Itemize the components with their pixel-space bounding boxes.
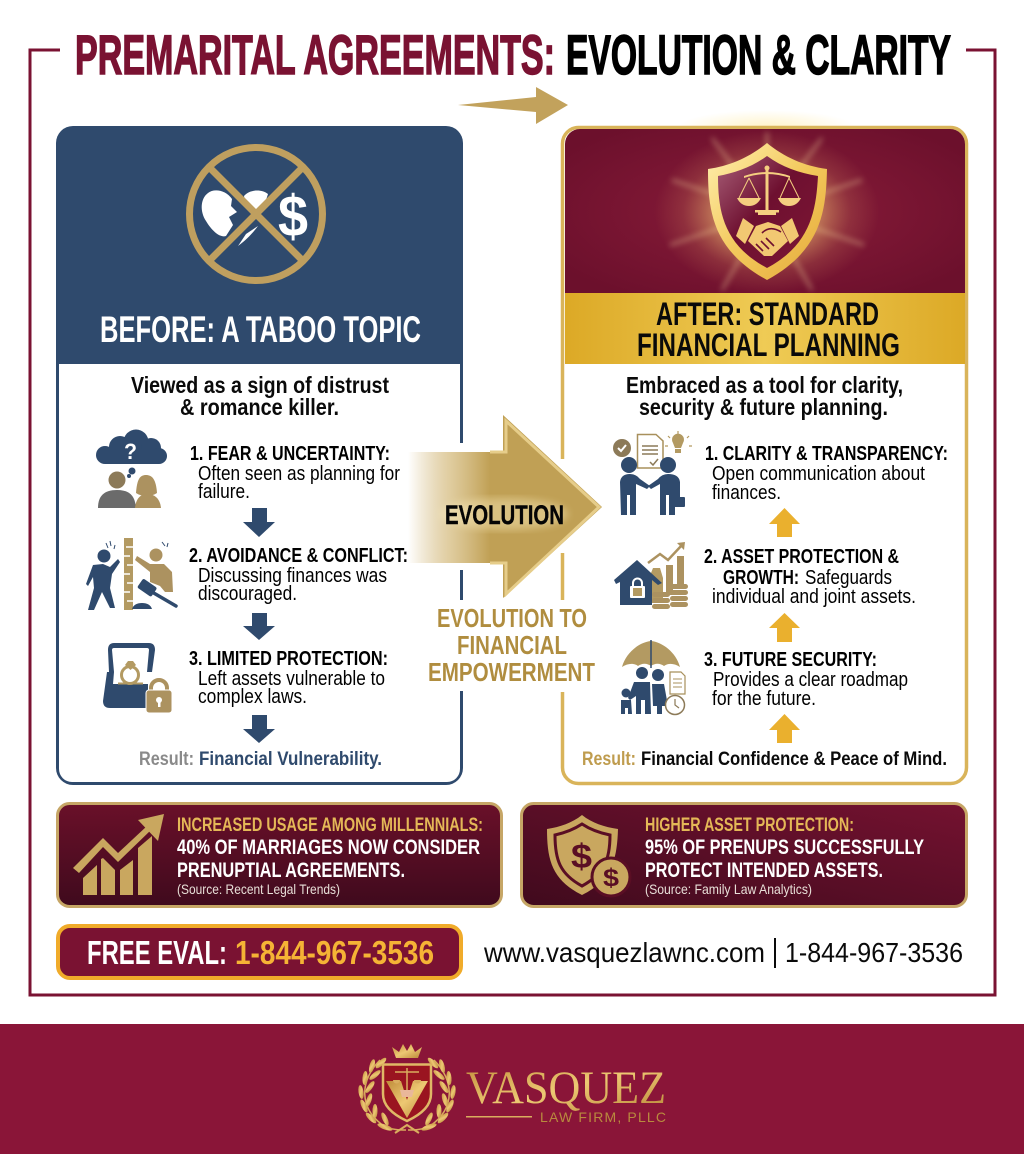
text: item 3 — [704, 649, 908, 710]
text: asset protection stat: PROTECT INTENDED ASSETS. — [645, 858, 883, 882]
icon: ring box and lock — [103, 643, 172, 713]
text: item 1: failure. — [198, 481, 250, 503]
text: item 2: individual and joint assets. — [712, 586, 916, 608]
header: maroon shield area — [565, 129, 965, 293]
heading: after — [637, 296, 900, 363]
panel: before — [56, 126, 463, 785]
label: evolution: EVOLUTION — [445, 500, 564, 530]
text: millennials stat: (Source: Recent Legal Trends) — [177, 881, 340, 897]
arrow: center evolution arrow — [408, 415, 602, 598]
icon: conflict and wall — [86, 538, 176, 610]
text: item 3: 3. FUTURE SECURITY: — [704, 649, 877, 671]
caption: evolution to financial empowerment: EMPOWERMENT — [428, 657, 595, 687]
text: item 2: 2. ASSET PROTECTION & — [704, 546, 899, 568]
subheading: after — [626, 372, 903, 420]
text: item 3: Provides a clear roadmap — [713, 669, 908, 691]
icon: couple with question cloud — [96, 430, 167, 508]
text: millennials stat: PRENUPTIAL AGREEMENTS. — [177, 858, 405, 882]
text: item 1: Often seen as planning for — [198, 463, 400, 485]
icon: shield with dollar: $ — [603, 864, 619, 892]
text: item 2 — [189, 545, 408, 605]
arrow: down 2 — [243, 613, 275, 640]
arrow: down 3 — [243, 715, 275, 743]
icon: no broken heart or money: $ — [278, 184, 308, 249]
result: after: Result: — [582, 749, 636, 770]
caption: evolution to financial empowerment — [428, 603, 595, 687]
heading: before: BEFORE: A TABOO TOPIC — [100, 309, 421, 350]
caption: evolution to financial empowerment: FINANCIAL — [457, 630, 567, 660]
panel: after — [562, 128, 966, 784]
contact line — [483, 937, 963, 968]
icon: shield with dollar: $ — [571, 838, 592, 876]
icon: no broken heart or money — [190, 148, 322, 280]
text: item 1: finances. — [712, 482, 781, 504]
text: item 2: Safeguards — [805, 567, 892, 589]
caption: evolution to financial empowerment: EVOLUTION TO — [437, 603, 587, 633]
logo wordmark: LAW FIRM, PLLC — [540, 1109, 666, 1125]
icon: shield with scales and handshake — [637, 131, 897, 293]
call to action button: FREE EVAL: — [87, 934, 227, 971]
result: after: Financial Confidence & Peace of Mind. — [641, 749, 947, 770]
subheading: after: Embraced as a tool for clarity, — [626, 372, 903, 398]
heading: after: AFTER: STANDARD — [656, 296, 879, 332]
result: before — [139, 749, 382, 770]
result: before: Result: — [139, 749, 194, 770]
text: asset protection stat — [645, 815, 924, 897]
contact line: 1-844-967-3536 — [785, 937, 963, 968]
text: item 3: Left assets vulnerable to — [198, 668, 385, 690]
text: item 1 — [705, 443, 948, 504]
band: gold heading — [565, 293, 965, 364]
text: item 1: Open communication about — [712, 463, 925, 485]
icon: house and growth — [614, 542, 688, 609]
text: item 2: discouraged. — [198, 583, 297, 605]
text: millennials stat — [177, 815, 483, 897]
glow above after panel — [677, 110, 857, 146]
text: asset protection stat: (Source: Family Law Analytics) — [645, 881, 812, 897]
stat panel: millennials — [58, 804, 502, 906]
arrow: down 1 — [243, 508, 275, 537]
text: item 1: 1. CLARITY & TRANSPARENCY: — [705, 443, 948, 465]
heading: after: FINANCIAL PLANNING — [637, 327, 900, 363]
subheading: before: Viewed as a sign of distrust — [131, 372, 389, 398]
text: asset protection stat: HIGHER ASSET PROTECTION: — [645, 815, 854, 836]
text: item 2: GROWTH: — [723, 567, 799, 589]
text: item 3 — [189, 648, 388, 708]
text: item 3: complex laws. — [198, 686, 307, 708]
call to action button: 1-844-967-3536 — [235, 934, 434, 971]
icon: family under umbrella — [621, 640, 685, 714]
text: millennials stat: INCREASED USAGE AMONG MILLENNIALS: — [177, 815, 483, 836]
icon: couple with question cloud: ? — [124, 439, 137, 464]
arrow: up 3 — [769, 714, 800, 743]
text: millennials stat: 40% OF MARRIAGES NOW CONSIDER — [177, 835, 480, 859]
arrow: top gold arrow — [458, 87, 568, 124]
footer band — [0, 1024, 1024, 1154]
text: item 1: 1. FEAR & UNCERTAINTY: — [190, 443, 390, 465]
call to action button — [58, 926, 461, 978]
text: item 2: 2. AVOIDANCE & CONFLICT: — [189, 545, 408, 567]
arrow: up 1 — [769, 508, 800, 537]
text: item 3: for the future. — [712, 688, 816, 710]
text: item 2 — [704, 546, 916, 608]
title: PREMARITAL AGREEMENTS: — [75, 23, 555, 86]
logo wordmark: VASQUEZ — [466, 1062, 666, 1114]
icon: handshake and document — [613, 431, 692, 515]
text: item 3: 3. LIMITED PROTECTION: — [189, 648, 388, 670]
stat panel: asset protection — [522, 804, 966, 906]
contact line: www.vasquezlawnc.com — [483, 937, 765, 968]
result: before: Financial Vulnerability. — [199, 749, 382, 770]
icon: growth chart — [73, 814, 164, 895]
subheading: after: security & future planning. — [639, 394, 888, 420]
icon: shield with dollar — [547, 815, 630, 896]
arrow: up 2 — [769, 613, 800, 642]
subheading: before — [131, 372, 389, 420]
subheading: before: & romance killer. — [180, 394, 339, 420]
outer frame — [30, 50, 995, 995]
logo emblem — [358, 1044, 456, 1133]
text: asset protection stat: 95% OF PRENUPS SUCCESSFULLY — [645, 835, 924, 859]
text: item 1 — [190, 443, 400, 503]
text: item 2: Discussing finances was — [198, 565, 387, 587]
